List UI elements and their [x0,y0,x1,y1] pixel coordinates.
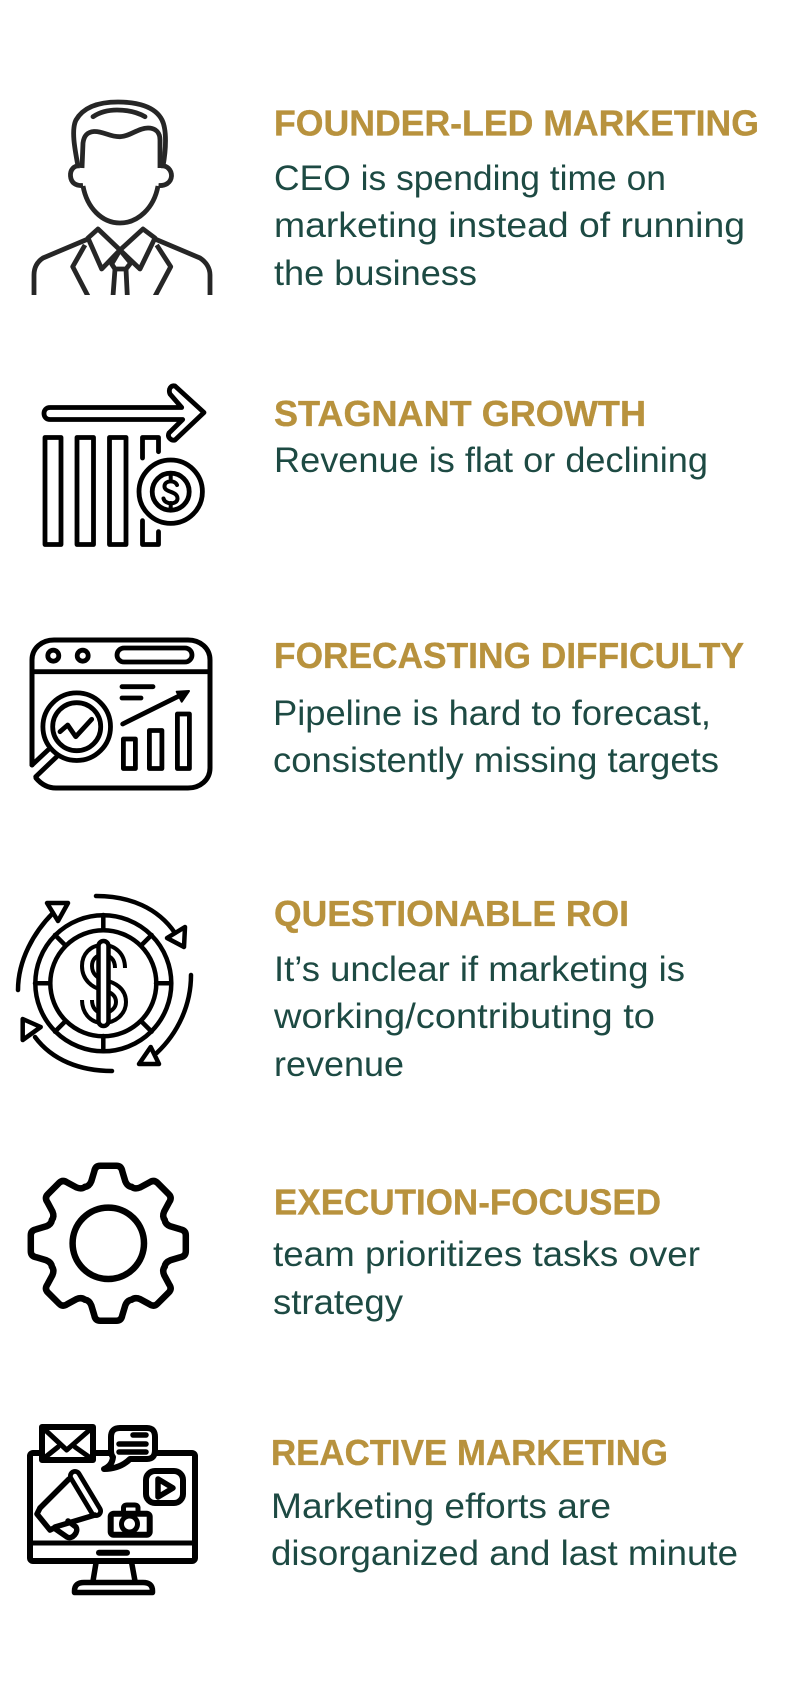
text block: It’s unclear if marketing is [274,949,685,989]
text block: consistently missing targets [273,740,719,780]
text block: disorganized and last minute [271,1533,738,1573]
panel: reactive marketing [30,1427,738,1592]
text block: revenue [274,1044,404,1084]
heading: REACTIVE MARKETING [271,1432,668,1473]
text block: Revenue is flat or declining [274,440,708,480]
icon: gear [31,1166,186,1321]
heading: FOUNDER-LED MARKETING [274,102,759,144]
text block: Marketing efforts are [271,1486,611,1526]
panel: forecasting difficulty [32,635,744,788]
text block: Pipeline is hard to forecast, [273,693,711,733]
text block: CEO is spending time on [274,158,666,198]
text block: the business [274,253,477,293]
heading: EXECUTION-FOCUSED [274,1182,661,1222]
text block: team prioritizes tasks over [273,1234,700,1274]
icon: dollar coin with cycle arrows [18,896,191,1071]
icon: bars, arrow and coin [44,386,204,544]
icon: dashboard with magnifier [32,640,210,788]
text block: working/contributing to [273,996,655,1036]
panel: founder-led marketing [34,102,759,300]
panel: stagnant growth [44,386,708,544]
icon: monitor with marketing channels [30,1427,195,1592]
icon: businessman [34,102,210,300]
heading: QUESTIONABLE ROI [274,893,629,934]
panel: questionable ROI [18,893,685,1084]
text block: strategy [273,1282,403,1322]
heading: STAGNANT GROWTH [274,393,646,434]
text block: marketing instead of running [274,205,745,245]
heading: FORECASTING DIFFICULTY [274,635,744,676]
panel: execution-focused [31,1166,700,1322]
